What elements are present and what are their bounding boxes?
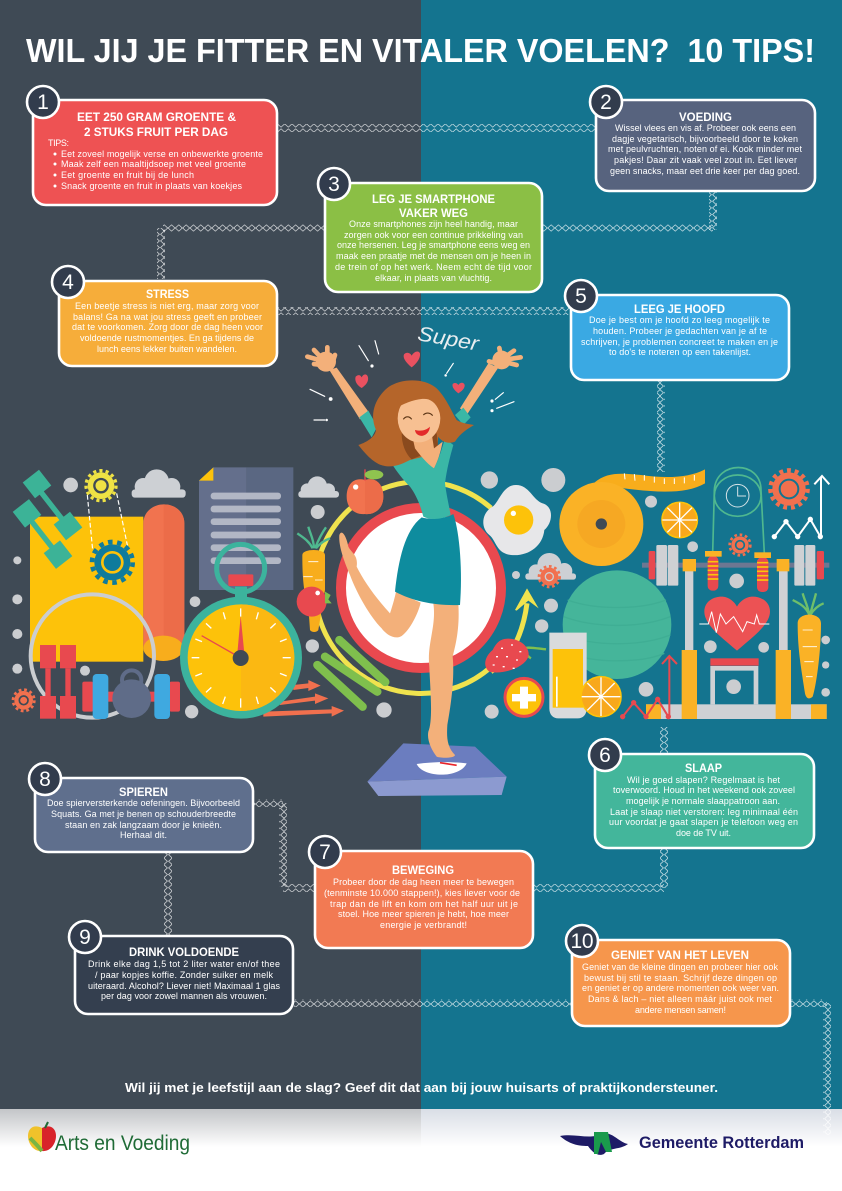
panel: tip 5 leeg je hoofd	[565, 280, 789, 380]
panel: tip 5 leeg je hoofd: schrijven, je problemen concreet te maken en je	[581, 337, 778, 347]
panel: tip 1 groente en fruit: Eet groente en fruit bij de lunch	[61, 170, 194, 180]
panel: tip 3 smartphone: zorgen ook voor een continue prikkeling van	[344, 230, 523, 240]
icon: apple	[347, 469, 383, 514]
panel: tip 8 spieren	[29, 763, 253, 852]
panel: tip 7 beweging: (tenminste 10.000 stappen!), kies liever voor de	[324, 888, 520, 898]
icon: red dumbbells	[40, 645, 76, 719]
panel: tip 9 drink voldoende	[69, 921, 293, 1014]
connector chains between the tips	[157, 124, 831, 1135]
panel: tip 8 spieren: 8	[39, 768, 51, 791]
panel: tip 10 geniet van het leven	[566, 925, 790, 1026]
icon: document	[199, 467, 293, 590]
panel: tip 3 smartphone: elkaar, in plaats van vluchtig.	[375, 273, 492, 283]
panel: tip 2 voeding	[590, 86, 815, 191]
panel: tip 7 beweging: 7	[319, 841, 331, 864]
icon: barbell with kettlebell	[82, 670, 180, 719]
logo: arts en voeding	[28, 1122, 190, 1155]
panel: tip 9 drink voldoende: DRINK VOLDOENDE	[129, 947, 239, 959]
panel: tip 7 beweging: BEWEGING	[392, 865, 454, 877]
panel: tip 2 voeding: dagje vegetarisch, bijvoorbeeld door te koken	[612, 134, 798, 144]
sleeves	[359, 411, 377, 437]
panel: tip 10 geniet van het leven: en geniet er op andere momenten ook weer van.	[582, 983, 779, 993]
panel: tip 1 groente en fruit	[27, 86, 277, 205]
panel: tip 7 beweging: stoel. Hoe meer spieren je hebt, hoe meer	[338, 909, 509, 919]
icon: measuring tape	[559, 469, 705, 566]
icon: orange gear	[13, 690, 34, 711]
icon: asparagus	[317, 640, 385, 707]
panel: tip 9 drink voldoende: 9	[79, 926, 91, 949]
panel: tip 10 geniet van het leven: 10	[570, 930, 594, 953]
title: WIL JIJ JE FITTER EN VITALER VOELEN? 10 TIPS!	[26, 32, 815, 69]
panel: tip 6 slaap: toverwoord. Houd in het weekend ook zoveel	[613, 785, 795, 795]
handwritten word: super: Super	[416, 322, 482, 356]
panel: tip 7 beweging: Probeer door de dag heen meer te bewegen	[333, 877, 514, 887]
arms	[307, 347, 521, 419]
panel: tip 10 geniet van het leven: GENIET VAN HET LEVEN	[611, 950, 749, 962]
panel: tip 5 leeg je hoofd: houden. Probeer je gedachten van je af te	[593, 326, 767, 336]
panel: tip 5 leeg je hoofd: LEEG JE HOOFD	[634, 304, 725, 316]
closing call to action: Wil jij met je leefstijl aan de slag? Geef dit dat aan bij jouw huisarts of praktijkondersteuner.	[125, 1080, 718, 1095]
icon: orange gears	[730, 470, 808, 555]
icon: fried egg	[483, 485, 551, 555]
panel: tip 4 stress: balans! Ga na wat jou stress geeft en probeer	[73, 312, 262, 322]
scale	[367, 743, 507, 796]
panel: tip 9 drink voldoende: Drink elke dag 1,5 tot 2 liter water en/of thee	[88, 959, 280, 969]
panel: tip 1 groente en fruit: 1	[37, 91, 49, 114]
panel: tip 4 stress: 4	[62, 271, 74, 294]
panel: tip 10 geniet van het leven: bewust bij stil te staan. Schrijf deze dingen op	[584, 973, 777, 983]
panel: tip 10 geniet van het leven: Dans & lach – niet alleen máár juist ook met	[588, 994, 772, 1004]
panel: tip 8 spieren: Herhaal dit.	[120, 830, 167, 840]
icon: exercise ball	[563, 570, 671, 679]
panel: tip 3 smartphone: VAKER WEG	[399, 208, 468, 220]
panel: tip 8 spieren: staan en zak langzaam door je knieën.	[65, 820, 222, 830]
icon: cloud	[132, 469, 186, 498]
panel: tip 2 voeding: met peulvruchten, noten of ei. Kook minder met	[608, 144, 802, 154]
icon: stopwatch	[180, 544, 302, 719]
neck and chest	[412, 433, 443, 468]
panel: tip 6 slaap: doe de TV uit.	[676, 828, 731, 838]
arrow: white growth line	[772, 476, 829, 539]
panel: tip 7 beweging: trap dan de lift en kom om het half uur uit je	[330, 899, 518, 909]
panel: tip 2 voeding: pakjes! Daar zit vaak veel zout in. Eet liever	[614, 155, 797, 165]
sleeve right	[455, 408, 471, 425]
panel: tip 4 stress: Een beetje stress is niet erg, maar zorg voor	[75, 301, 259, 311]
panel: tip 3 smartphone: de trein of op het werk. Neem echt de tijd voor	[335, 262, 532, 272]
central red and white disc	[341, 508, 501, 668]
panel: tip 2 voeding: VOEDING	[679, 112, 732, 124]
icon: strawberry	[485, 639, 546, 673]
icon: heart with heartbeat	[699, 597, 770, 651]
top	[392, 438, 453, 519]
panel: tip 8 spieren: SPIEREN	[119, 787, 168, 799]
panel: tip 6 slaap: Laat je slaap niet verstoren: leg minimaal één	[610, 807, 798, 817]
icon: orange slice top	[662, 502, 697, 538]
panel: tip 4 stress: STRESS	[146, 289, 189, 301]
panel: tip 10 geniet van het leven: Geniet van de kleine dingen en probeer hier ook	[582, 962, 778, 972]
icon: hula hoop	[31, 594, 154, 718]
panel: tip 1 groente en fruit: Maak zelf een maaltijdsoep met veel groente	[61, 159, 246, 169]
panel: tip 4 stress: lunch eens lekker buiten wandelen.	[97, 344, 237, 354]
panel: tip 1 groente en fruit: TIPS:	[48, 138, 69, 148]
panel: tip 1 groente en fruit: Snack groente en fruit in plaats van koekjes	[61, 181, 242, 191]
hearts	[355, 352, 465, 393]
panel: tip 10 geniet van het leven: andere mensen samen!	[635, 1005, 726, 1015]
icon: cloud with gear	[525, 553, 576, 587]
icon: carrot with tomato	[297, 527, 332, 632]
icon: weight rack	[642, 545, 829, 719]
exclamation marks	[310, 341, 514, 421]
icon: arrows	[263, 680, 344, 717]
panel: tip 3 smartphone	[318, 168, 542, 292]
icon: skipping rope and clock	[713, 467, 764, 553]
panel: tip 3 smartphone: 3	[328, 173, 340, 196]
panel: tip 6 slaap: Wil je goed slapen? Regelmaat is het	[627, 775, 780, 785]
panel: tip 4 stress: voldoende rustmomentjes. En ga tijdens de	[80, 333, 254, 343]
icon: glass of juice	[549, 633, 587, 718]
panel: tip 3 smartphone: Onze smartphones zijn heel handig, maar	[349, 219, 518, 229]
panel: tip 6 slaap: SLAAP	[685, 763, 722, 775]
icon: yellow gear	[86, 471, 116, 501]
icon: carrot	[793, 593, 824, 698]
illustration: happy woman on scale	[307, 322, 521, 796]
panel: tip 4 stress	[52, 266, 277, 366]
logo: gemeente rotterdam	[560, 1132, 804, 1155]
panel: tip 5 leeg je hoofd: to do's te noteren op een takenlijst.	[609, 347, 751, 357]
panel: tip 3 smartphone: LEG JE SMARTPHONE	[372, 194, 495, 206]
panel: tip 5 leeg je hoofd: 5	[575, 285, 587, 308]
icon: rope handles	[705, 551, 771, 592]
panel: tip 7 beweging: energie je verbrandt!	[380, 920, 467, 930]
panel: tip 1 groente en fruit: 2 STUKS FRUIT PER DAG	[84, 127, 228, 139]
panel: tip 8 spieren: Doe spierversterkende oefeningen. Bijvoorbeeld	[47, 798, 240, 808]
panel: tip 3 smartphone: maak een praatje met de mensen om je heen in	[336, 251, 531, 261]
panel: tip 6 slaap	[589, 739, 814, 848]
panel: tip 8 spieren: Squats. Ga met je benen op schouderbreedte	[51, 809, 236, 819]
face	[397, 385, 441, 442]
panel: tip 5 leeg je hoofd: Doe je best om je hoofd zo leeg mogelijk te	[589, 315, 770, 325]
panel: tip 9 drink voldoende: uiteraard. Alcohol? Liever niet! Maximaal 1 glas	[88, 981, 280, 991]
standing leg	[428, 603, 459, 758]
panel: tip 6 slaap: mogelijk je normale slaappatroon aan.	[626, 796, 780, 806]
bent leg	[339, 533, 421, 637]
hair	[358, 380, 474, 466]
panel: tip 7 beweging	[309, 836, 533, 948]
central yellow ring	[315, 482, 491, 694]
icon: plus badge	[505, 678, 543, 716]
panel: tip 3 smartphone: onze hersenen. Leg je smartphone eens weg en	[337, 240, 530, 250]
icon: blue gear	[92, 542, 133, 583]
panel: tip 2 voeding: geen snacks, maar eet drie keer per dag goed.	[610, 166, 800, 176]
arrow: red growth line	[620, 656, 677, 719]
panel: tip 1 groente en fruit: EET 250 GRAM GROENTE &	[77, 112, 236, 124]
illustration: food and fitness icons right	[481, 467, 830, 719]
panel: tip 4 stress: dat te voorkomen. Zorg door de dag heen voor	[72, 322, 263, 332]
logo: gemeente rotterdam: Gemeente Rotterdam	[639, 1133, 804, 1152]
icon: orange slice bottom	[581, 677, 621, 717]
icon: cloud small	[298, 476, 339, 498]
skirt	[395, 514, 461, 605]
panel: tip 6 slaap: 6	[599, 744, 611, 767]
logo: arts en voeding: Arts en Voeding	[55, 1132, 190, 1155]
panel: tip 2 voeding: Wissel vlees en vis af. Probeer ook eens een	[615, 123, 796, 133]
panel: tip 6 slaap: uur voordat je gaat slapen je telefoon weg en	[609, 817, 798, 827]
panel: tip 1 groente en fruit: Eet zoveel mogelijk verse en onbewerkte groente	[61, 149, 263, 159]
panel: tip 9 drink voldoende: / paar kopjes koffie. Zonder suiker en melk	[95, 970, 274, 980]
illustration: fitness icons left	[12, 467, 392, 719]
arrow: yellow upward	[491, 588, 539, 672]
panel: tip 2 voeding: 2	[600, 91, 612, 114]
panel: tip 9 drink voldoende: per dag voor zowel mannen als vrouwen.	[101, 991, 267, 1001]
